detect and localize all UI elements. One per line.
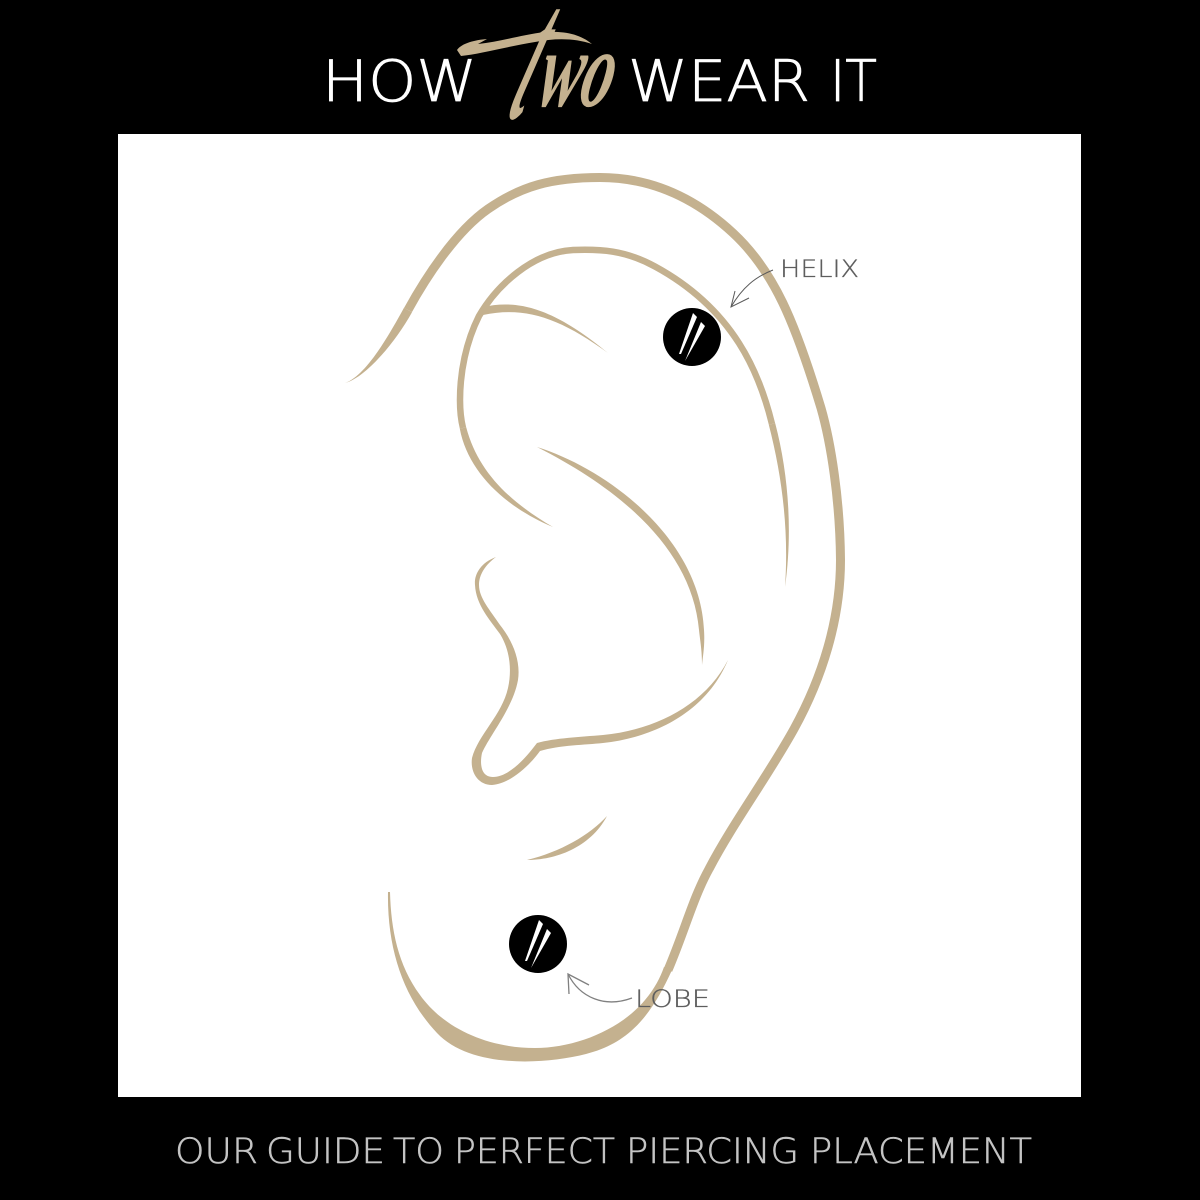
title: HOW bbox=[322, 49, 477, 115]
subtitle: PIERCING bbox=[626, 1132, 799, 1172]
upper fold branch bbox=[483, 304, 608, 353]
subtitle: PERFECT bbox=[454, 1132, 615, 1172]
subtitle: OUR bbox=[175, 1132, 258, 1172]
ear outer contour bbox=[345, 178, 840, 1061]
subtitle: TO bbox=[393, 1132, 444, 1172]
tragus and concha contour bbox=[472, 557, 728, 785]
title: IT bbox=[830, 49, 877, 115]
arrow: lobe label to stud bbox=[568, 974, 632, 1002]
label: lobe: LOBE bbox=[635, 985, 710, 1013]
lobe crease bbox=[527, 816, 607, 860]
icon: lobe piercing stud bbox=[509, 915, 567, 973]
subtitle: PLACEMENT bbox=[810, 1132, 1032, 1172]
title: WEAR bbox=[628, 49, 810, 115]
arrow: helix label to stud bbox=[731, 270, 773, 307]
antihelix curve bbox=[537, 447, 704, 665]
subtitle bbox=[175, 1132, 1032, 1172]
title script word: two: wo bbox=[528, 8, 632, 130]
inner helix fold bbox=[460, 250, 789, 587]
subtitle: GUIDE bbox=[266, 1132, 385, 1172]
icon: helix piercing stud bbox=[663, 308, 721, 366]
label: helix: HELIX bbox=[780, 255, 859, 283]
title bbox=[322, 0, 877, 160]
ear illustration bbox=[345, 178, 840, 1061]
title script word: two bbox=[457, 0, 632, 160]
panel: white ear diagram bbox=[118, 134, 1081, 1097]
